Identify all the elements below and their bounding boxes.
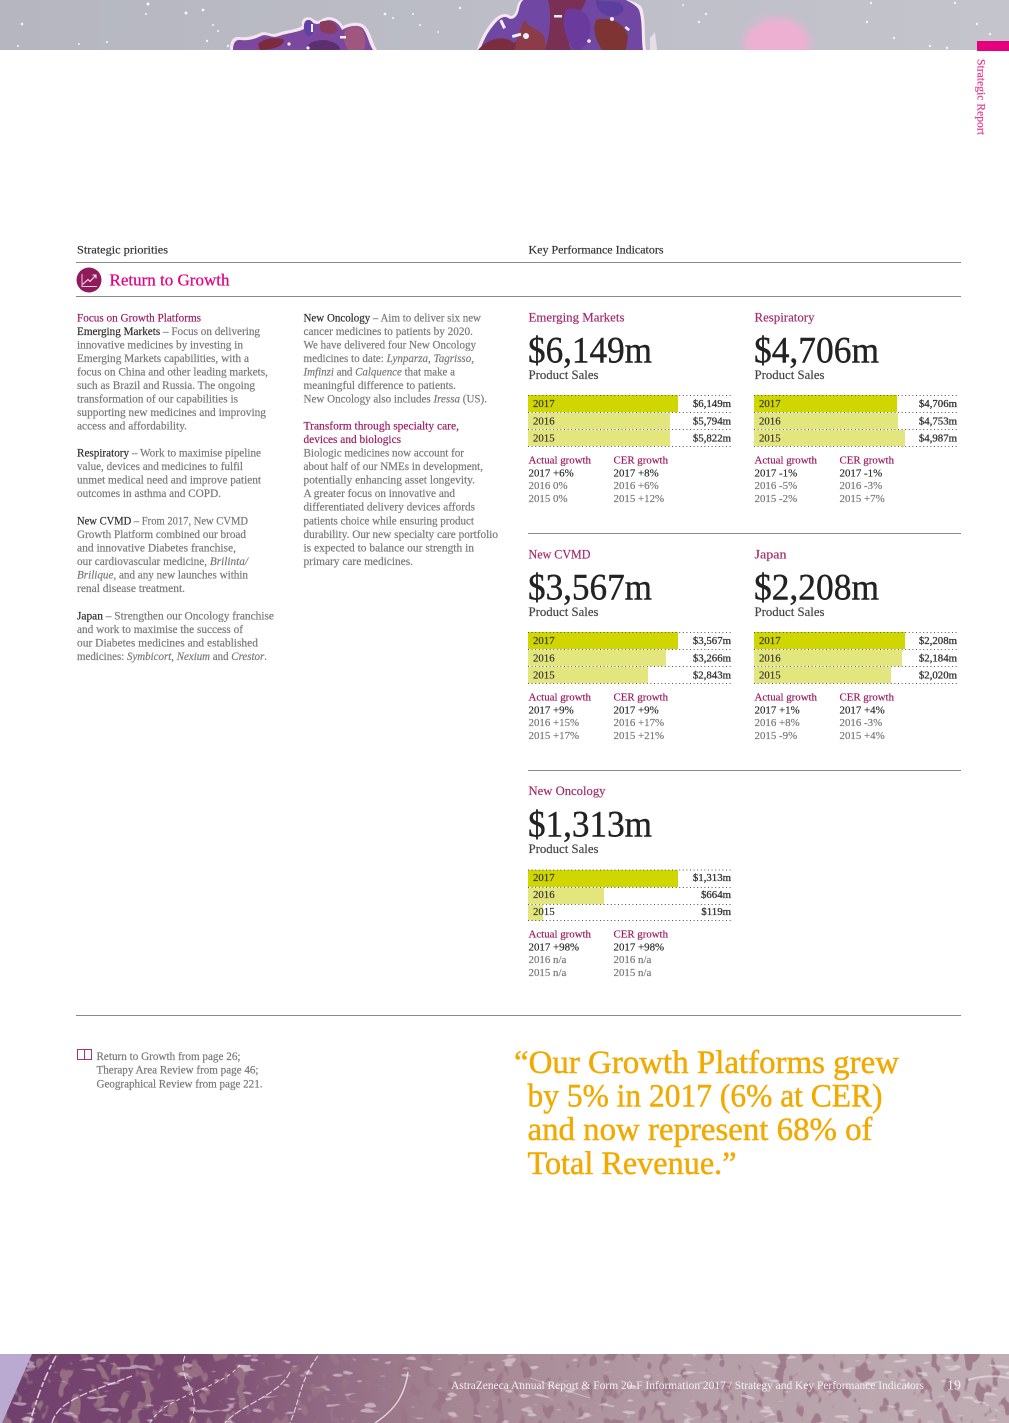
growth figures: 2015 -9%	[754, 730, 797, 742]
growth figures: 2016 n/a	[528, 954, 566, 966]
return to growth heading: Return to Growth	[110, 270, 230, 290]
KPI panel: New Oncology: New Oncology	[528, 783, 606, 798]
page number: 19	[947, 1378, 961, 1392]
growth figures: 2015 +21%	[614, 730, 664, 742]
KPI panel: New Oncology: $1,313m	[528, 804, 652, 846]
text column: focus on growth platforms: and innovative Diabetes franchise,	[77, 542, 236, 554]
bar chart: 2016	[759, 416, 781, 428]
bar chart: 2017	[759, 635, 781, 647]
growth figures: 2016 -3%	[840, 717, 882, 729]
bar chart: $664m	[701, 889, 732, 901]
bar chart: $5,822m	[693, 432, 732, 444]
text column: focus on growth platforms: focus on China and other leading markets,	[77, 366, 268, 378]
growth figures: 2016 +6%	[614, 480, 659, 492]
text column: new oncology and specialty care: New Oncology – Aim to deliver six new	[304, 312, 482, 324]
column headings: Key Performance Indicators	[528, 244, 664, 256]
KPI panel: New CVMD: New CVMD	[528, 546, 590, 562]
growth figures	[754, 692, 895, 742]
growth figures: 2017 +98%	[614, 942, 664, 954]
bar chart	[754, 632, 959, 684]
molecule cluster left	[230, 17, 377, 50]
growth figures: CER growth	[614, 928, 669, 940]
growth figures: Actual growth	[528, 692, 592, 704]
growth figures: 2016 -3%	[840, 480, 882, 492]
text column: new oncology and specialty care: Transform through specialty care,	[304, 420, 459, 432]
growth figures: 2016 n/a	[614, 954, 651, 966]
growth figures: Actual growth	[754, 454, 818, 466]
bar chart: $3,266m	[693, 652, 732, 664]
growth figures: 2016 +8%	[754, 717, 800, 729]
text column: focus on growth platforms: Brilique, and any new launches within	[77, 568, 248, 582]
growth figures: 2015 +17%	[528, 730, 579, 742]
text column: focus on growth platforms: renal disease treatment.	[77, 582, 185, 595]
vertical section label: Strategic Report	[974, 59, 986, 136]
KPI panel: New CVMD: Product Sales	[528, 604, 598, 619]
text column: new oncology and specialty care: A greater focus on innovative and	[304, 487, 455, 500]
KPI panel: Japan: Japan	[754, 546, 787, 562]
bar chart: 2016	[759, 652, 781, 664]
molecule cluster centre	[477, 0, 657, 50]
KPI panel: New CVMD: $3,567m	[528, 568, 652, 608]
fibre strands	[30, 1356, 1009, 1423]
growth figures: 2015 n/a	[614, 967, 651, 979]
text column: focus on growth platforms: Growth Platform combined our broad	[77, 528, 246, 541]
growth figures: Actual growth	[528, 454, 592, 466]
text column: new oncology and specialty care: medicines to date: Lynparza, Tagrisso,	[304, 352, 474, 365]
growth figures: 2017 +6%	[528, 468, 574, 480]
growth figures	[528, 692, 669, 742]
text column: new oncology and specialty care: Biologic medicines now account for	[304, 446, 464, 460]
KPI panel: Emerging Markets: $6,149m	[528, 330, 652, 372]
pull quote: and now represent 68% of	[528, 1112, 873, 1148]
text column: focus on growth platforms: unmet medical need and improve patient	[77, 474, 262, 486]
KPI panel: Respiratory: $4,706m	[754, 330, 879, 372]
cross-reference note	[78, 1050, 263, 1090]
bar chart: $2,184m	[919, 652, 958, 664]
cross-reference note: Geographical Review from page 221.	[96, 1078, 263, 1090]
text column: new oncology and specialty care: patients choice while ensuring product	[304, 514, 475, 528]
text column: focus on growth platforms: and work to maximise the success of	[77, 623, 243, 636]
KPI panel: Japan: Product Sales	[754, 604, 824, 619]
bar chart	[528, 395, 733, 446]
text column: focus on growth platforms: access and affordability.	[77, 420, 187, 432]
pull quote: Total Revenue.”	[528, 1146, 736, 1182]
bar chart: 2016	[533, 416, 555, 428]
growth figures: Actual growth	[528, 928, 592, 940]
KPI panel: Japan: $2,208m	[754, 568, 879, 608]
growth figures: 2015 -2%	[754, 493, 797, 505]
pull quote	[514, 1045, 899, 1182]
text column: focus on growth platforms: our Diabetes medicines and established	[77, 636, 258, 650]
growth figures: 2017 +8%	[614, 468, 659, 480]
growth figures	[528, 454, 669, 505]
bar chart: 2015	[759, 432, 781, 444]
cross-reference note: Therapy Area Review from page 46;	[96, 1064, 258, 1076]
column headings	[77, 244, 664, 256]
text column: new oncology and specialty care: primary care medicines.	[304, 555, 413, 568]
text column: new oncology and specialty care	[303, 312, 498, 568]
text column: new oncology and specialty care: New Oncology also includes Iressa (US).	[304, 392, 487, 406]
growth figures: 2017 +4%	[840, 704, 885, 716]
text column: new oncology and specialty care: about half of our NMEs in development,	[304, 460, 483, 473]
icon: open book	[78, 1050, 92, 1060]
text column: focus on growth platforms: Japan – Strengthen our Oncology franchise	[77, 610, 274, 622]
KPI panel: New Oncology: Product Sales	[528, 841, 598, 856]
bar chart	[528, 632, 733, 684]
text column: focus on growth platforms	[77, 312, 274, 663]
section tab	[974, 41, 1009, 136]
growth figures: 2017 +1%	[754, 704, 800, 716]
text column: focus on growth platforms: such as Brazil and Russia. The ongoing	[77, 379, 255, 392]
text column: focus on growth platforms: our cardiovascular medicine, Brilinta/	[77, 555, 250, 568]
bar chart: 2015	[533, 670, 555, 682]
bar chart: $3,567m	[693, 635, 732, 647]
pull quote: “Our Growth Platforms grew	[514, 1045, 899, 1081]
growth figures: 2017 +9%	[614, 704, 659, 716]
bar chart: $4,753m	[919, 416, 958, 428]
text column: focus on growth platforms: Respiratory – Work to maximise pipeline	[77, 446, 261, 460]
bar chart: 2016	[533, 652, 555, 664]
text column: focus on growth platforms: medicines: Symbicort, Nexium and Crestor.	[77, 650, 267, 663]
text column: new oncology and specialty care: devices and biologics	[304, 433, 401, 446]
growth figures: CER growth	[614, 692, 669, 704]
growth figures: 2017 -1%	[754, 468, 797, 480]
KPI panel: Respiratory	[754, 310, 959, 505]
top photo band	[0, 0, 1009, 50]
lavender corner	[0, 1354, 32, 1423]
text column: new oncology and specialty care: meaningful difference to patients.	[304, 379, 456, 392]
growth figures: 2015 0%	[528, 493, 568, 505]
text column: new oncology and specialty care: We have delivered four New Oncology	[304, 338, 476, 352]
growth figures: 2016 0%	[528, 480, 568, 492]
text column: new oncology and specialty care: potentially enhancing asset longevity.	[304, 474, 475, 486]
KPI panel: Japan	[754, 546, 959, 742]
bar chart: 2017	[533, 635, 555, 647]
growth figures: CER growth	[840, 692, 895, 704]
text column: focus on growth platforms: Emerging Markets – Focus on delivering	[77, 325, 260, 338]
bar chart: $4,987m	[919, 432, 958, 444]
bar chart: 2017	[533, 872, 555, 884]
bar chart: $2,020m	[919, 670, 958, 682]
text column: focus on growth platforms: innovative medicines by investing in	[77, 338, 243, 352]
KPI panel: Respiratory: Respiratory	[754, 310, 815, 324]
bottom photo band	[0, 1354, 1009, 1423]
growth figures: 2015 +7%	[840, 493, 885, 505]
bar chart: 2015	[533, 432, 555, 444]
bar chart: $1,313m	[693, 872, 732, 884]
growth figures: 2017 -1%	[840, 468, 882, 480]
bar chart	[754, 395, 959, 446]
growth figures: 2017 +98%	[528, 942, 579, 954]
text column: focus on growth platforms: transformation of our capabilities is	[77, 392, 238, 406]
bar chart: 2016	[533, 889, 555, 901]
bar chart: $2,843m	[693, 670, 732, 682]
text column: focus on growth platforms: Emerging Markets capabilities, with a	[77, 352, 249, 365]
text column: new oncology and specialty care: is expected to balance our strength in	[304, 542, 474, 554]
growth figures: 2017 +9%	[528, 704, 574, 716]
text column: new oncology and specialty care: durability. Our new specialty care portfolio	[304, 528, 498, 541]
icon: growth chart	[76, 268, 102, 292]
text column: new oncology and specialty care: cancer medicines to patients by 2020.	[304, 325, 473, 338]
growth figures: 2015 n/a	[528, 967, 566, 979]
bar chart: 2017	[533, 398, 555, 410]
growth figures: CER growth	[840, 454, 895, 466]
text column: focus on growth platforms: supporting new medicines and improving	[77, 406, 266, 419]
footer text: AstraZeneca Annual Report & Form 20-F Information 2017 / Strategy and Key Performance Indicators	[451, 1380, 925, 1392]
growth figures: 2016 -5%	[754, 480, 797, 492]
text column: focus on growth platforms: value, devices and medicines to fulfil	[77, 460, 243, 473]
KPI panel: Emerging Markets	[528, 310, 733, 505]
text column: focus on growth platforms: New CVMD – From 2017, New CVMD	[77, 514, 248, 528]
KPI panel: New CVMD	[528, 546, 733, 742]
growth figures: 2016 +17%	[614, 717, 664, 729]
KPI panel: Respiratory: Product Sales	[754, 367, 824, 382]
cross-reference note: Return to Growth from page 26;	[96, 1050, 240, 1063]
pink blurred cell	[741, 14, 813, 50]
bar chart: 2015	[533, 906, 555, 918]
bar chart: $2,208m	[919, 635, 958, 647]
growth figures	[528, 928, 669, 979]
KPI panel: Emerging Markets: Product Sales	[528, 367, 598, 382]
bar chart: 2017	[759, 398, 781, 410]
KPI panel: Emerging Markets: Emerging Markets	[528, 310, 624, 324]
growth figures: 2016 +15%	[528, 717, 579, 729]
text column: new oncology and specialty care: differentiated delivery devices affords	[304, 500, 475, 514]
bar chart: 2015	[759, 670, 781, 682]
bar chart: $5,794m	[693, 416, 732, 428]
text column: new oncology and specialty care: Imfinzi and Calquence that make a	[303, 366, 455, 378]
KPI panel: New Oncology	[528, 783, 733, 979]
bar chart: $6,149m	[693, 398, 732, 410]
growth figures: CER growth	[614, 454, 669, 466]
white particles	[17, 2, 991, 49]
bar chart: $4,706m	[919, 398, 958, 410]
growth figures	[754, 454, 895, 505]
bar chart	[528, 870, 733, 920]
return to growth heading	[76, 268, 230, 292]
pull quote: by 5% in 2017 (6% at CER)	[528, 1078, 882, 1114]
bar chart: $119m	[701, 906, 732, 918]
growth figures: 2015 +12%	[614, 493, 664, 505]
column headings: Strategic priorities	[77, 244, 169, 256]
text column: focus on growth platforms: Focus on Growth Platforms	[77, 312, 201, 324]
text column: focus on growth platforms: outcomes in asthma and COPD.	[77, 487, 221, 500]
growth figures: 2015 +4%	[840, 730, 885, 742]
growth figures: Actual growth	[754, 692, 818, 704]
